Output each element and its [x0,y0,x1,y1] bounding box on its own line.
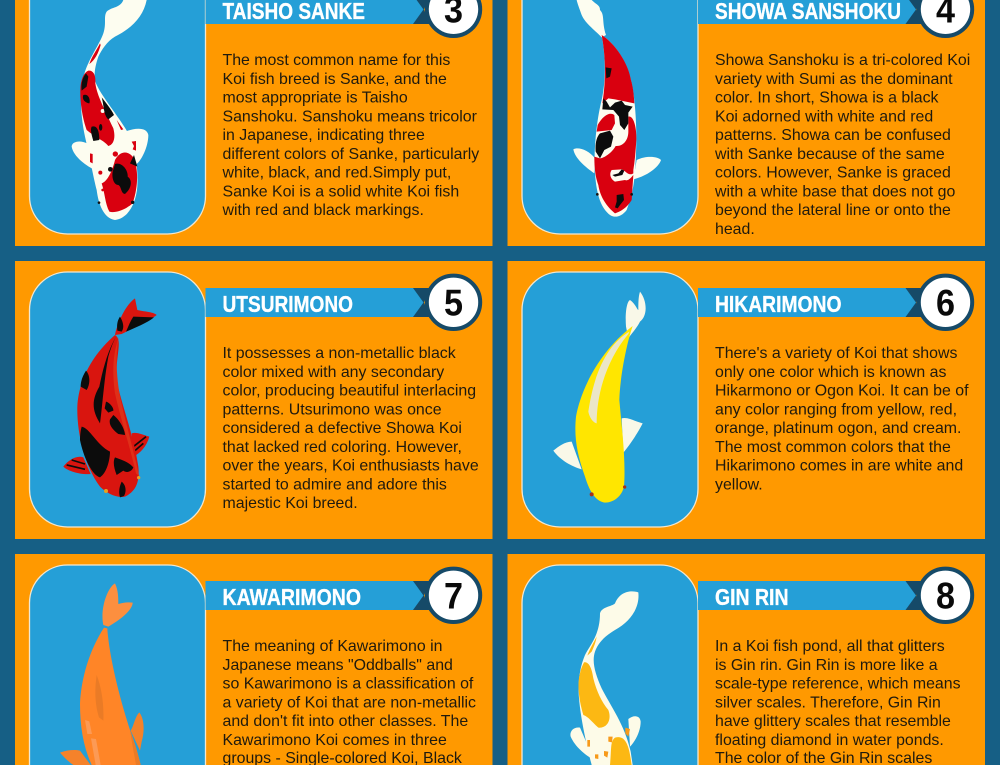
description: Taisho Sanke: most appropriate is Taisho [222,90,408,106]
description: Gin Rin: scale-type reference, which means [715,676,961,692]
description: Utsurimono: color mixed with any secondary [222,364,444,381]
description: Kawarimono: so Kawarimono is a classification of [222,676,474,692]
description: Utsurimono: majestic Koi breed. [222,495,358,512]
panel: Taisho Sanke [15,0,492,246]
description: Kawarimono: and don't fit into other classes. The [222,713,468,730]
description: Showa Sanshoku: Showa Sanshoku is a tri-colored Koi [715,52,970,69]
description: Kawarimono: a variety of Koi that are non-metallic [222,694,476,711]
description: Hikarimono: The most common colors that the [715,439,951,456]
number badge 6: 6 [936,282,955,324]
panel: Kawarimono [15,554,492,765]
image box: Showa Sanshoku [522,0,698,234]
illustration: Kawarimono koi [60,583,144,765]
image box: Kawarimono [30,565,206,765]
number badge 8 [919,569,972,622]
illustration: Hikarimono koi [553,292,646,503]
description: Utsurimono: started to admire and adore this [222,476,447,493]
panel: Gin Rin [508,554,985,765]
description: Hikarimono: yellow. [715,476,763,493]
number badge 5: 5 [444,282,463,324]
heading: Gin Rin: GIN RIN [715,584,788,610]
number badge 4 [917,0,974,38]
ribbon: Utsurimono [206,288,430,317]
description: Kawarimono: Japanese means "Oddballs" and [222,657,453,674]
description: Utsurimono: that lacked red coloring. However, [222,439,462,456]
description: Gin Rin: have glittery scales that resemble [715,713,951,730]
description: Taisho Sanke: Sanke Koi is a solid white Koi fish [222,183,459,200]
description: Kawarimono: Kawarimono Koi comes in three [222,732,447,749]
number badge 7 [427,569,480,622]
panel: Hikarimono [508,261,985,539]
heading: Kawarimono: KAWARIMONO [222,584,361,610]
description: Taisho Sanke: white, black, and red.Simply put, [222,164,451,182]
illustration: Utsurimono koi [63,298,157,497]
panel: Showa Sanshoku [508,0,985,246]
description: Taisho Sanke: Koi fish breed is Sanke, and the [222,71,447,88]
description: Showa Sanshoku: colors. However, Sanke is graced [715,164,951,182]
ribbon: Taisho Sanke [206,0,430,24]
number badge 5 [427,276,480,329]
ribbon: Showa Sanshoku [698,0,922,24]
description: Taisho Sanke: The most common name for this [222,52,450,69]
description: Showa Sanshoku: patterns. Showa can be confused [715,127,951,144]
description: Showa Sanshoku: head. [715,221,755,238]
description: Hikarimono: Hikarimono comes in are white and [715,458,963,474]
description: Showa Sanshoku: color. In short, Showa is a black [715,90,939,106]
ribbon: Kawarimono [206,581,430,610]
description: Taisho Sanke: in Japanese, indicating three [222,127,425,144]
description: Hikarimono: orange, platinum ogon, and cream. [715,420,961,437]
description: Showa Sanshoku: with a white base that does not go [714,183,955,200]
number badge 3 [425,0,482,38]
description: Hikarimono: There's a variety of Koi that shows [715,345,957,362]
description: Hikarimono: only one color which is known as [715,364,946,381]
image box: Utsurimono [30,272,206,527]
illustration: Gin Rin koi [570,591,641,765]
description: Taisho Sanke: Sanshoku. Sanshoku means tricolor [222,108,478,125]
number badge 6 [919,276,972,329]
number badge 7: 7 [444,576,463,616]
description: Showa Sanshoku: variety with Sumi as the dominant [715,71,953,88]
description: Taisho Sanke: with red and black markings. [222,202,424,219]
ribbon: Gin Rin [698,581,922,610]
description: Showa Sanshoku: with Sanke because of the same [714,146,945,163]
image box: Hikarimono [522,272,698,527]
description: Utsurimono: patterns. Utsurimono was once [222,401,442,418]
description: Utsurimono: over the years, Koi enthusiasts have [222,458,479,474]
description: Kawarimono: The meaning of Kawarimono in [222,638,442,655]
number badge 8: 8 [936,576,955,616]
heading: Hikarimono: HIKARIMONO [715,291,842,317]
description: Taisho Sanke: different colors of Sanke, particularly [222,146,479,163]
heading: Utsurimono: UTSURIMONO [222,291,353,317]
description: Gin Rin: In a Koi fish pond, all that glitters [715,638,945,655]
description: Gin Rin: floating diamond in water ponds. [715,732,944,749]
description: Showa Sanshoku: Koi adorned with white and red [715,108,933,125]
description: Hikarimono: Hikarmono or Ogon Koi. It can be of [715,382,969,400]
image box: Taisho Sanke [30,0,206,234]
description: Utsurimono: It possesses a non-metallic black [222,345,456,362]
description: Utsurimono: color, producing beautiful interlacing [222,382,476,400]
description: Hikarimono: any color ranging from yellow, red, [715,401,957,418]
panel: Utsurimono [15,261,492,539]
illustration: Taisho Sanke koi [72,0,148,220]
illustration: Showa Sanshoku koi [573,0,661,217]
description: Showa Sanshoku: beyond the lateral line or onto the [715,202,951,219]
description: Gin Rin: is Gin rin. Gin Rin is more like a [715,657,938,674]
ribbon: Hikarimono [698,288,922,317]
description: Utsurimono: considered a defective Showa Koi [222,420,462,437]
description: Gin Rin: silver scales. Therefore, Gin Rin [715,694,941,711]
image box: Gin Rin [522,565,698,765]
